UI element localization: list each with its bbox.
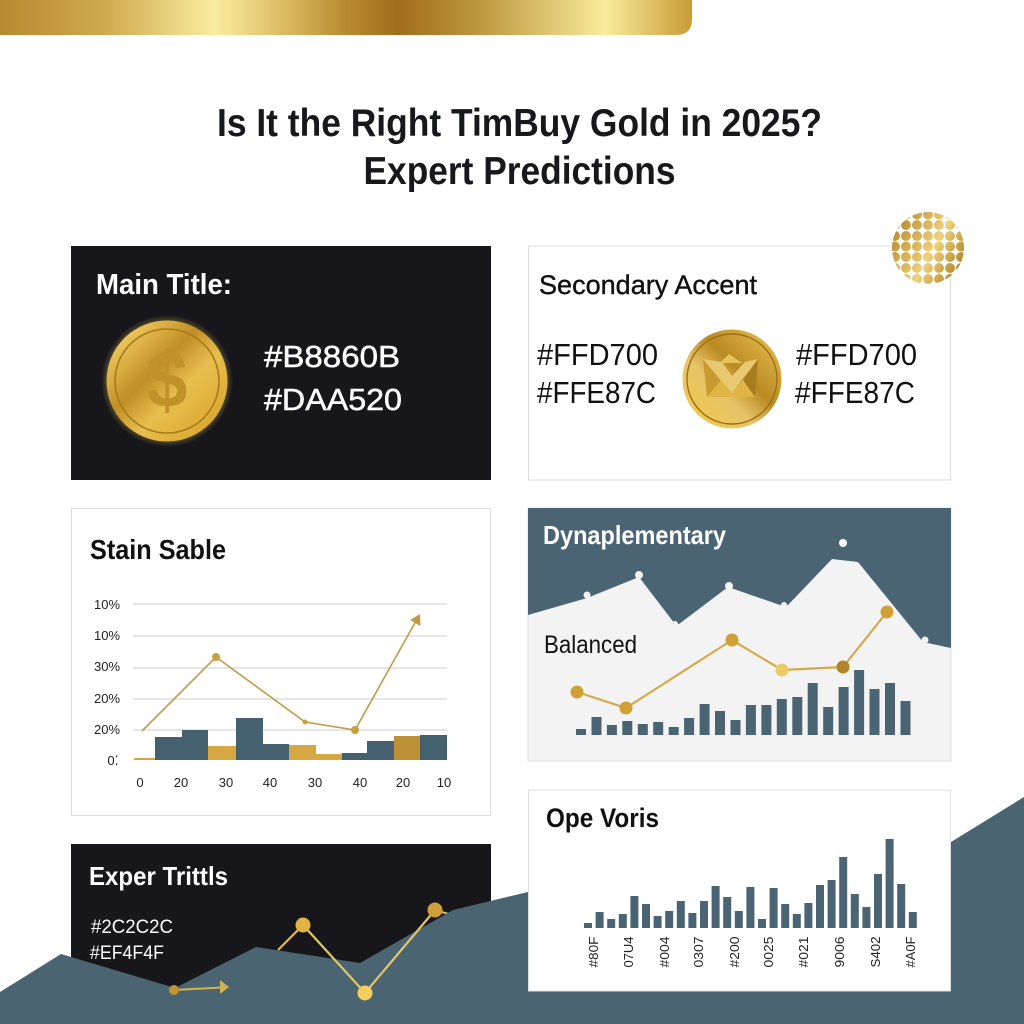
rotated axis labels: 07U4: [622, 936, 636, 968]
icon: gold dot circle: [890, 210, 966, 284]
x axis labels: 20: [396, 775, 410, 790]
rotated axis labels: 9006: [833, 936, 847, 968]
y axis labels: 20%: [94, 691, 120, 706]
y axis labels: 10%: [94, 628, 120, 643]
rotated axis labels: 0025: [762, 936, 776, 968]
bar chart: [134, 718, 447, 760]
x axis labels: [136, 775, 451, 790]
rotated axis labels: #A0F: [904, 936, 918, 968]
x axis labels: 20: [174, 775, 188, 790]
rotated axis labels: #021: [797, 936, 811, 968]
panel: stain sable chart: [72, 508, 490, 816]
white peak markers: [584, 571, 928, 644]
hex codes: #B8860B: [264, 339, 400, 374]
title: Expert Predictions: [364, 150, 676, 193]
hex codes left: [537, 337, 658, 410]
heading: secondary accent: Secondary Accent: [539, 270, 757, 300]
slate mountain band: [528, 508, 951, 648]
y axis labels: 30%: [94, 659, 120, 674]
bar chart: [576, 670, 910, 735]
hex codes right: #FFD700: [796, 337, 917, 372]
title: [217, 102, 822, 193]
title: Is It the Right TimBuy Gold in 2025?: [217, 102, 822, 145]
icon: envelope coin: [682, 330, 782, 428]
gold line and arrow on terrain: [169, 902, 442, 1000]
rotated axis labels: #004: [658, 936, 672, 968]
panel: ope voris: [528, 790, 950, 991]
icon: dollar coin: [101, 315, 233, 447]
hex codes: #EF4F4F: [90, 943, 164, 964]
hex codes: #2C2C2C: [91, 917, 173, 938]
line behind terrain: [278, 925, 303, 950]
hex codes left: #FFE87C: [537, 375, 656, 410]
x axis labels: 40: [353, 775, 367, 790]
panel: secondary accent: [528, 246, 950, 480]
hex codes left: #FFD700: [537, 337, 658, 372]
heading: stain sable: Stain Sable: [90, 534, 226, 565]
rotated axis labels: #200: [728, 936, 742, 968]
y axis labels: 20%: [94, 722, 120, 737]
panel: expert titles: [71, 844, 491, 994]
line chart with arrow: [142, 614, 420, 734]
panel: main title: [71, 246, 491, 480]
heading: exper trittls: Exper Trittls: [89, 861, 228, 891]
rotated axis labels: 0307: [692, 936, 706, 968]
top gold bar: [0, 0, 692, 35]
rotated axis labels: S402: [869, 936, 883, 968]
x axis labels: 30: [308, 775, 322, 790]
y axis labels: 10%: [94, 597, 120, 612]
hex codes: [90, 917, 173, 964]
x axis labels: 10: [437, 775, 451, 790]
x axis labels: 40: [263, 775, 277, 790]
heading: dynaplementary: Dynaplementary: [543, 520, 726, 550]
heading: main title: Main Title:: [96, 269, 232, 301]
hex codes: [264, 339, 402, 417]
y axis labels: [94, 597, 120, 768]
icon: dollar coin: $: [146, 335, 188, 424]
rotated axis labels: [587, 936, 918, 968]
gold line chart: [570, 606, 894, 714]
hex codes right: #FFE87C: [795, 375, 915, 410]
bar chart: [584, 839, 917, 928]
panel: dynaplementary: [528, 508, 951, 761]
hex codes: #DAA520: [264, 382, 402, 417]
y axis labels: 0⁚: [107, 753, 119, 768]
x axis labels: 30: [219, 775, 233, 790]
hex codes right: [795, 337, 917, 410]
label: balanced: Balanced: [544, 631, 637, 659]
x axis labels: 0: [136, 775, 144, 790]
heading: ope voris: Ope Voris: [546, 803, 659, 833]
rotated axis labels: #80F: [587, 936, 601, 968]
slate terrain: [0, 797, 1024, 1024]
